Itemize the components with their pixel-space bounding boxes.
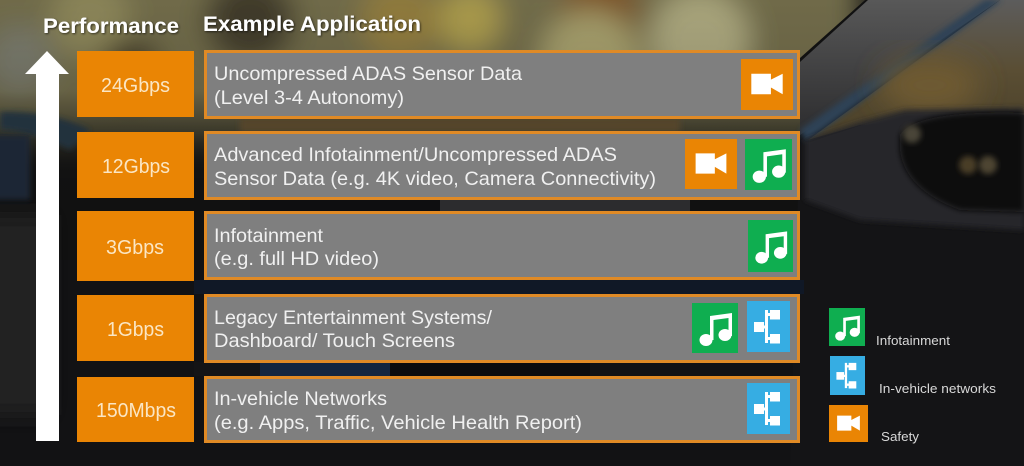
row: 150Mbps bbox=[77, 377, 798, 442]
dashboard screens seen between the rows bbox=[240, 118, 680, 132]
legend: infotainment bbox=[829, 308, 950, 348]
panel: uncompressed ADAS sensor data: Uncompressed ADAS Sensor Data bbox=[214, 63, 522, 85]
rate box: 3Gbps: 3Gbps bbox=[106, 237, 164, 259]
heading: Performance: Performance bbox=[43, 15, 179, 38]
icon: infotainment music note bbox=[745, 139, 792, 190]
legend: in-vehicle networks bbox=[830, 356, 997, 396]
legend: safety: Safety bbox=[881, 429, 920, 444]
panel: legacy entertainment: Dashboard/ Touch Screens bbox=[214, 330, 455, 352]
panel: legacy entertainment bbox=[206, 296, 798, 362]
a-pillar and window bbox=[790, 0, 1024, 466]
icon: infotainment music note bbox=[692, 303, 738, 353]
icon: safety camera bbox=[685, 139, 737, 189]
heading: Example Application: Example Application bbox=[203, 13, 421, 36]
row: 1Gbps bbox=[77, 295, 798, 362]
legend: infotainment: Infotainment bbox=[876, 333, 950, 348]
panel: infotainment: (e.g. full HD video) bbox=[214, 248, 379, 270]
legend: safety bbox=[829, 405, 920, 444]
panel: infotainment: Infotainment bbox=[214, 225, 324, 247]
rate box: 3Gbps bbox=[77, 211, 194, 281]
panel: in-vehicle networks: In-vehicle Networks bbox=[214, 388, 387, 410]
row: 24Gbps bbox=[77, 51, 798, 118]
rate box: 24Gbps: 24Gbps bbox=[101, 75, 170, 97]
row: 12Gbps bbox=[77, 132, 798, 198]
icon: in-vehicle network bbox=[747, 383, 790, 434]
panel: uncompressed ADAS sensor data bbox=[206, 52, 798, 118]
arrow: performance axis bbox=[25, 51, 69, 441]
panel: advanced infotainment bbox=[206, 132, 798, 198]
row: 3Gbps bbox=[77, 211, 798, 281]
rate box: 1Gbps: 1Gbps bbox=[107, 319, 164, 341]
panel: advanced infotainment: Advanced Infotainment/Uncompressed ADAS bbox=[214, 144, 617, 166]
panel: advanced infotainment: Sensor Data (e.g. 4K video, Camera Connectivity) bbox=[214, 168, 656, 190]
panel: in-vehicle networks: (e.g. Apps, Traffic, Vehicle Health Report) bbox=[214, 412, 582, 434]
rate box: 150Mbps bbox=[77, 377, 194, 442]
rate box: 150Mbps: 150Mbps bbox=[96, 400, 176, 422]
icon: in-vehicle network bbox=[747, 301, 790, 352]
rate box: 12Gbps bbox=[77, 132, 194, 198]
icon: safety camera bbox=[741, 59, 793, 110]
legend bbox=[829, 308, 997, 444]
panel: legacy entertainment: Legacy Entertainment Systems/ bbox=[214, 307, 493, 329]
icon: infotainment music note bbox=[748, 220, 793, 272]
rate box: 1Gbps bbox=[77, 295, 194, 361]
rate box: 24Gbps bbox=[77, 51, 194, 117]
rate box: 12Gbps: 12Gbps bbox=[102, 156, 170, 178]
panel: in-vehicle networks bbox=[206, 378, 798, 442]
left steering wheel tones bbox=[0, 112, 90, 150]
legend: in-vehicle networks: In-vehicle networks bbox=[879, 381, 997, 396]
panel: uncompressed ADAS sensor data: (Level 3-4 Autonomy) bbox=[214, 87, 404, 109]
panel: infotainment bbox=[206, 212, 798, 278]
